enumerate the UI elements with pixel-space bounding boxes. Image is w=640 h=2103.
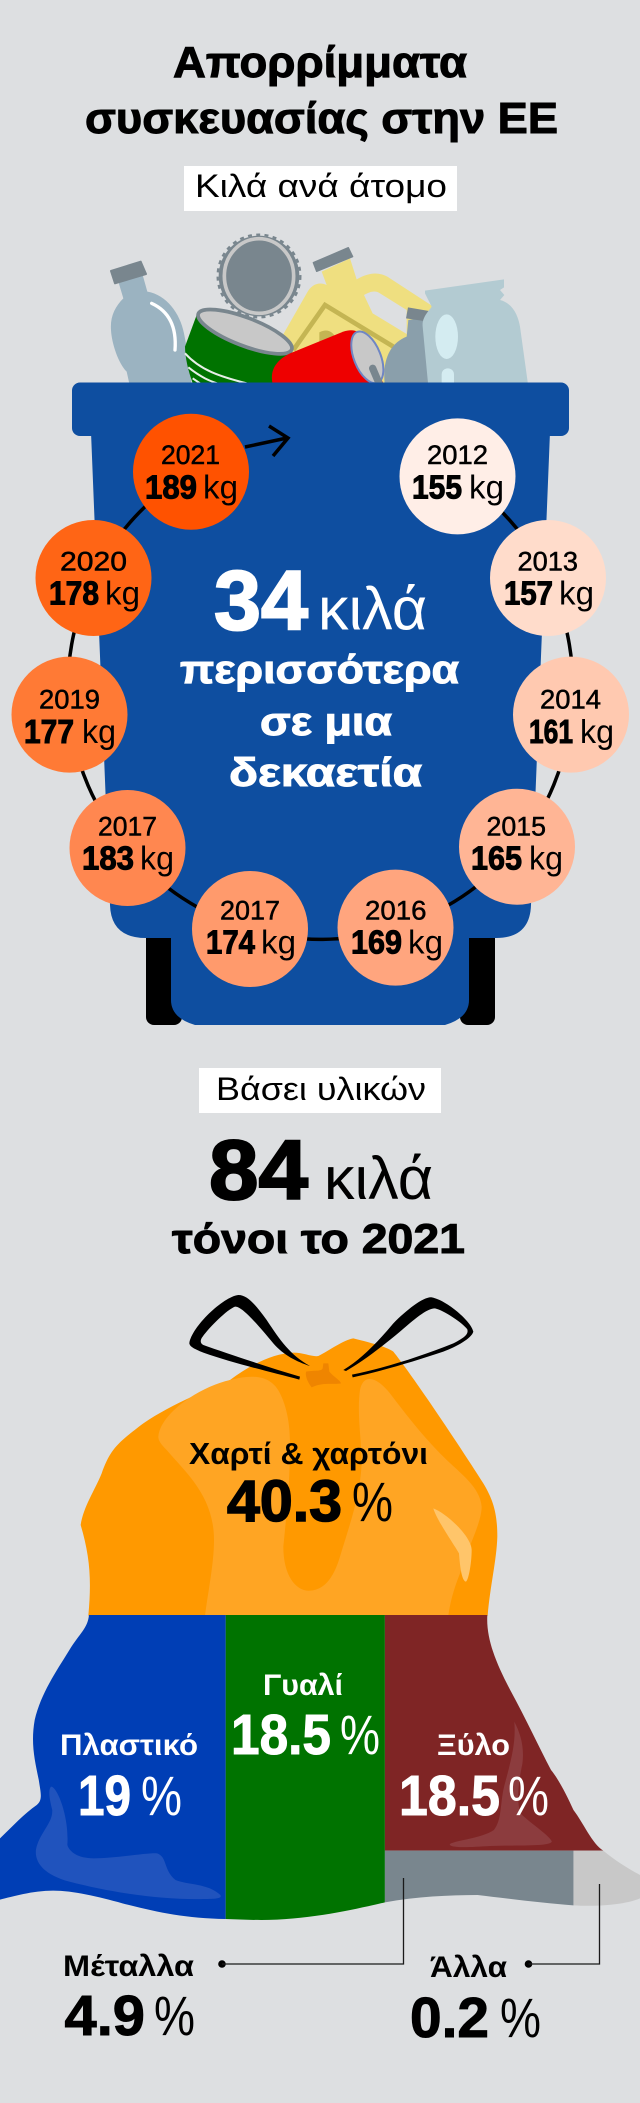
label: other 0.2%: Άλλα [430, 1951, 508, 1984]
label: glass 18.5%: Γυαλί [263, 1669, 343, 1702]
label: paper and cardboard 40.3%: % [352, 1470, 393, 1533]
year circle: 2015: kg [529, 840, 563, 876]
year circle: 2014 [513, 657, 629, 773]
headline stat: 34 kilos more in a decade: σε μια [260, 700, 392, 744]
label: metals 4.9%: Μέταλλα [63, 1950, 195, 1983]
illustration: waste items above the bin [111, 235, 528, 392]
year circle: 2014: kg [580, 713, 614, 750]
label: paper and cardboard 40.3%: Χαρτί & χαρτόνι [189, 1436, 428, 1471]
label: wood 18.5%: Ξύλο [437, 1729, 510, 1762]
year circle: 2016: 169 [351, 924, 402, 961]
year circle: 2013: 157 [504, 574, 553, 611]
year circle: 2020 [36, 520, 152, 636]
label: wood 18.5% [399, 1729, 549, 1828]
year circle: 2015: 2015 [486, 811, 546, 841]
title [85, 38, 558, 143]
label: other 0.2%: 0.2 [410, 1986, 489, 2050]
icon: plastic bottle [111, 262, 192, 387]
label: paper and cardboard 40.3% [189, 1436, 428, 1534]
year circle: 2017 (183 kg) [70, 790, 186, 906]
year circle: 2017 (183 kg): 183 [82, 840, 134, 876]
year circle: 2017 (174 kg) [192, 871, 308, 987]
rubbish bag: paper and cardboard section [81, 1338, 497, 1616]
leader line: other [525, 1884, 600, 1968]
year circle: 2013: kg [559, 574, 594, 611]
year circle: 2012: kg [469, 469, 504, 506]
label: plastic 19%: % [141, 1764, 182, 1827]
icon: bottle cap [218, 235, 300, 317]
icon: yellow jug [273, 248, 433, 387]
section: other [573, 1851, 640, 1906]
year circle: 2020: 178 [49, 574, 99, 611]
icon: bag handles [189, 1295, 473, 1380]
year circle: 2012: 2012 [427, 440, 488, 470]
label: other 0.2%: % [500, 1986, 541, 2049]
headline stat: 84 kilos: κιλά [324, 1145, 433, 1212]
label: wood 18.5%: % [508, 1764, 549, 1827]
title: συσκευασίας στην ΕΕ [85, 94, 558, 143]
year circle: 2014: 161 [529, 713, 573, 750]
year circle: 2013 [490, 520, 606, 636]
year circle: 2016: kg [408, 924, 443, 961]
year circle: 2021: 2021 [161, 440, 220, 470]
year circle: 2016 [338, 870, 454, 986]
headline stat: 84 kilos [172, 1123, 465, 1262]
label: metals 4.9%: % [154, 1984, 195, 2047]
year circle: 2017 (183 kg): 2017 [98, 811, 157, 841]
title: Απορρίμματα [173, 38, 467, 87]
section: metals [385, 1851, 573, 1905]
label: plastic 19%: 19 [78, 1764, 131, 1828]
year circle: 2016: 2016 [365, 896, 426, 926]
section label: by material [199, 1068, 441, 1113]
label: paper and cardboard 40.3%: 40.3 [227, 1469, 342, 1534]
year circle: 2020: 2020 [60, 547, 127, 577]
year circle: 2019: 2019 [39, 685, 100, 715]
section: plastic [0, 1615, 226, 1919]
section: wood [385, 1615, 603, 1851]
year circle: 2019: 177 [24, 713, 74, 750]
year circle: 2017 (174 kg): kg [261, 924, 296, 961]
icon: grey bottle [384, 307, 433, 387]
year circle: 2014: 2014 [540, 685, 601, 715]
label: glass 18.5%: 18.5 [231, 1703, 331, 1767]
label: plastic 19%: Πλαστικό [60, 1729, 198, 1762]
year circle: 2017 (174 kg): 2017 [220, 896, 280, 926]
year circle: 2012 [400, 418, 516, 534]
headline stat: 84 kilos: τόνοι το 2021 [172, 1215, 465, 1262]
year circle: 2017 (174 kg): 174 [206, 924, 256, 961]
icon: glass jar [423, 279, 528, 392]
year circle: 2015 [459, 789, 575, 905]
label: metals 4.9%: 4.9 [64, 1984, 145, 2048]
arrow: direction of the timeline [245, 426, 288, 456]
year circle: 2019: kg [82, 713, 116, 750]
headline stat: 34 kilos more in a decade: περισσότερα [180, 648, 459, 692]
label: glass 18.5% [231, 1669, 380, 1767]
subtitle label: kilos per person [184, 166, 457, 211]
year circle: 2015: 165 [471, 840, 522, 876]
section: glass [226, 1615, 385, 1920]
section label: by material: Βάσει υλικών [216, 1071, 426, 1107]
headline stat: 34 kilos more in a decade: δεκαετία [229, 751, 422, 795]
year circle: 2019 [12, 657, 128, 773]
leader line: metals [218, 1878, 404, 1968]
rubbish bag: lower material sections [0, 1615, 640, 1920]
headline stat: 34 kilos more in a decade: κιλά [318, 576, 427, 643]
year circle: 2021: kg [203, 469, 238, 506]
subtitle label: kilos per person: Κιλά ανά άτομο [195, 168, 447, 204]
headline stat: 34 kilos more in a decade [180, 554, 459, 795]
label: wood 18.5%: 18.5 [399, 1764, 500, 1828]
ring connecting the yearly values [68, 472, 573, 939]
icon: blue recycling bin [72, 382, 569, 1025]
icon: green tin can [185, 301, 297, 387]
year circle: 2021 [133, 414, 249, 530]
label: metals 4.9% [63, 1950, 195, 2048]
icon: bag knot [306, 1363, 341, 1387]
headline stat: 84 kilos: 84 [209, 1123, 308, 1217]
year circle: 2020: kg [105, 574, 140, 611]
label: glass 18.5%: % [340, 1703, 380, 1766]
year circle: 2012: 155 [412, 469, 462, 506]
year circle: 2017 (183 kg): kg [140, 840, 174, 876]
icon: red can [272, 327, 390, 388]
label: plastic 19% [60, 1729, 198, 1828]
label: other 0.2% [410, 1951, 541, 2050]
year circle: 2021: 189 [145, 469, 197, 506]
headline stat: 34 kilos more in a decade: 34 [214, 554, 308, 648]
year circle: 2013: 2013 [518, 547, 578, 577]
